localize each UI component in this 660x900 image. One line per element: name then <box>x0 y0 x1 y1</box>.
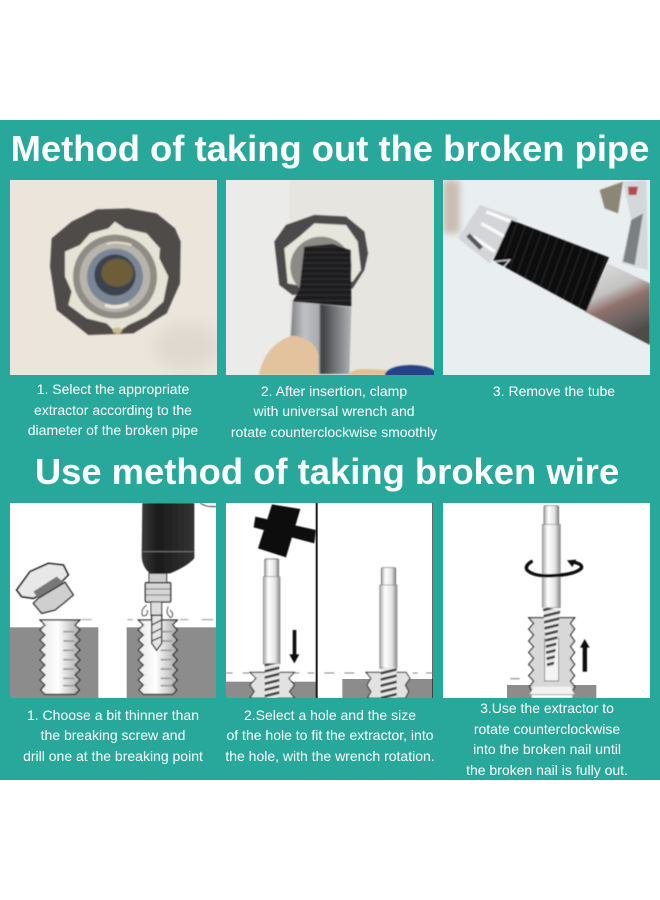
caption: step 2 pipe: rotate counterclockwise smoothly <box>231 424 437 440</box>
caption: step 1 wire: drill one at the breaking point <box>23 748 203 764</box>
diagram panel: drill the broken screw <box>10 503 217 698</box>
title: broken pipe: Method of taking out the broken pipe <box>11 128 649 169</box>
caption: step 3 wire: the broken nail is fully out. <box>466 762 628 778</box>
caption: step 1 wire: 1. Choose a bit thinner than <box>27 707 199 723</box>
extractor left <box>226 559 314 698</box>
down arrow <box>289 630 299 663</box>
drill <box>142 503 217 650</box>
photo panel: clamp with wrench <box>226 180 437 385</box>
up arrow <box>580 639 590 672</box>
threaded hole right <box>127 620 213 694</box>
photo panel: extractor selection <box>10 180 220 375</box>
caption: step 3 pipe: 3. Remove the tube <box>493 383 615 399</box>
caption: step 2 pipe: with universal wrench and <box>252 403 415 419</box>
caption: step 1 wire: the breaking screw and <box>41 727 185 743</box>
caption: step 2 wire: 2.Select a hole and the size <box>244 707 416 723</box>
teal background band <box>0 120 660 780</box>
threaded hole left <box>40 620 92 694</box>
photo panel: removed tube <box>443 180 650 375</box>
rotation arrow <box>526 560 582 576</box>
caption: step 3 wire: rotate counterclockwise <box>474 721 620 737</box>
caption: step 3 wire: into the broken nail until <box>473 741 621 757</box>
title: broken wire: Use method of taking broken wire <box>35 451 619 492</box>
caption: step 2 pipe: 2. After insertion, clamp <box>261 383 407 399</box>
broken bolt <box>17 563 73 613</box>
diagram panel: rotate extractor out <box>443 503 650 698</box>
caption: step 1 pipe: 1. Select the appropriate <box>37 381 189 397</box>
diagram panel: hammer in the extractor <box>226 503 434 698</box>
extracted nail <box>529 618 575 698</box>
extractor right <box>324 568 433 698</box>
hammer <box>254 504 316 557</box>
extractor shaft <box>542 506 560 667</box>
caption: step 1 pipe: diameter of the broken pipe <box>28 422 198 438</box>
caption: step 2 wire: of the hole to fit the extractor, into <box>226 727 434 743</box>
caption: step 2 wire: the hole, with the wrench rotation. <box>225 748 435 764</box>
caption: step 3 wire: 3.Use the extractor to <box>480 700 614 716</box>
caption: step 1 pipe: extractor according to the <box>34 402 192 418</box>
